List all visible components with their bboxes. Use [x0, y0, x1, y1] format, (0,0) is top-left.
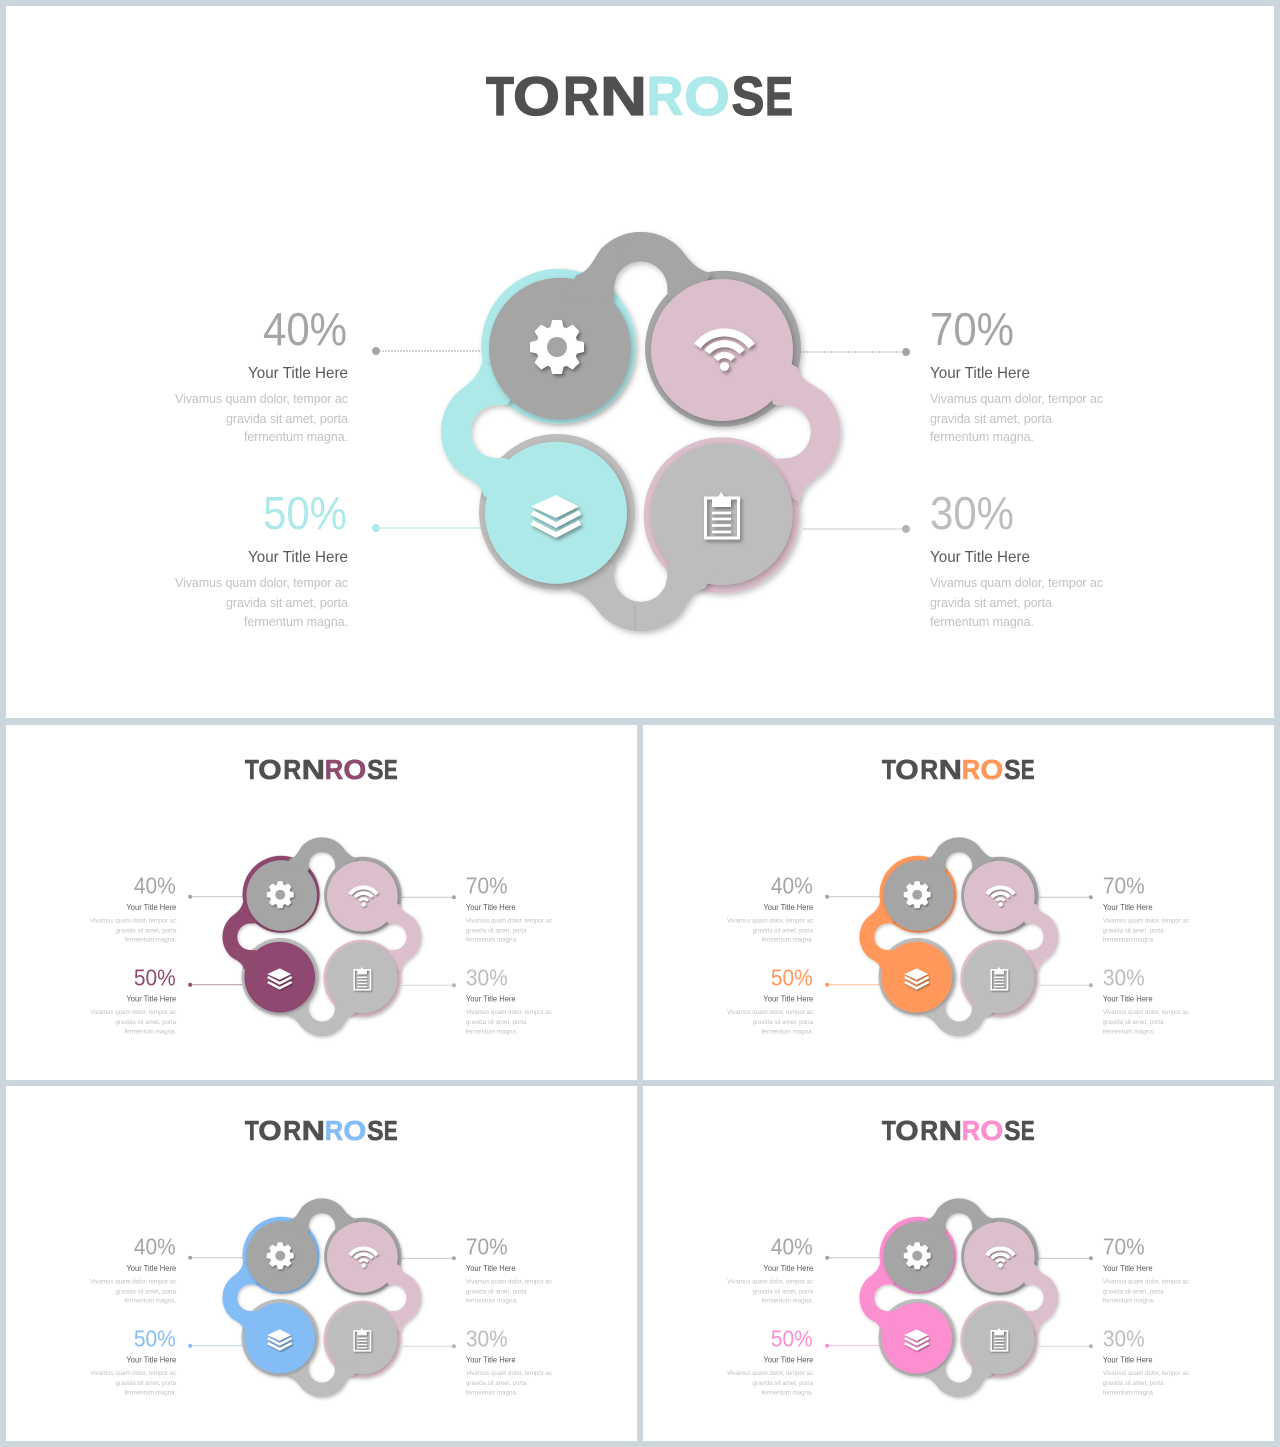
text block: 50%: 50%: [771, 964, 813, 990]
leader lines: [825, 1256, 1093, 1348]
title: T: [486, 65, 514, 127]
diagram: four linked circles: [222, 1198, 421, 1397]
text block: 50%: [727, 964, 814, 1036]
icon: wifi: [987, 1248, 1014, 1268]
text block: 70%: 70%: [1103, 873, 1145, 899]
text block: 40%: 40%: [134, 1234, 176, 1260]
text block: 40%: gravida sit amet, porta: [226, 412, 348, 426]
text block: 50%: [90, 1325, 177, 1397]
text block: 70%: [1103, 873, 1189, 943]
title: N: [939, 1115, 962, 1146]
panel: main teal slide: [6, 6, 1274, 718]
diagram: four linked circles: [859, 1198, 1058, 1397]
text block: 50%: gravida sit amet, porta: [226, 596, 348, 610]
text block: 40%: 40%: [771, 1234, 813, 1260]
title: R: [563, 65, 599, 127]
title: R: [920, 1115, 938, 1146]
title: E: [384, 1115, 398, 1146]
icon: wifi: [987, 887, 1014, 907]
title: N: [302, 754, 325, 785]
text block: 50%: Vivamus quam dolor, tempor ac: [175, 576, 348, 590]
title: R: [283, 754, 301, 785]
title: O: [980, 754, 1003, 785]
text block: 30%: fermentum magna.: [930, 615, 1034, 629]
text block: 50%: 50%: [263, 487, 347, 539]
text block: 50%: [727, 1325, 814, 1397]
title: O: [258, 754, 282, 785]
text block: 70%: Vivamus quam dolor, tempor ac: [1103, 918, 1189, 925]
text block: 30%: Vivamus quam dolor, tempor ac: [466, 1370, 552, 1377]
text block: 40%: 40%: [771, 873, 813, 899]
text block: 30%: 30%: [466, 964, 508, 990]
icon: gear: [267, 882, 293, 908]
slide content: pink: [727, 1115, 1189, 1397]
text block: 50%: Vivamus quam dolor, tempor ac: [727, 1370, 813, 1377]
text block: 40%: 40%: [263, 303, 347, 355]
text block: 70%: Your Title Here: [1103, 1264, 1153, 1273]
text block: 40%: fermentum magna.: [124, 1297, 176, 1304]
title: E: [384, 754, 398, 785]
title: S: [367, 1115, 383, 1146]
text block: 50%: fermentum magna.: [124, 1390, 176, 1397]
leader lines: [188, 895, 456, 987]
icon: wifi: [350, 887, 377, 907]
text block: 30%: fermentum magna.: [1103, 1029, 1155, 1036]
text block: 40%: fermentum magna.: [244, 430, 348, 444]
text block: 50%: Vivamus quam dolor, tempor ac: [90, 1370, 176, 1377]
text block: 40%: 40%: [134, 873, 176, 899]
text block: 30%: fermentum magna.: [1103, 1390, 1155, 1397]
icon: clipboard: [706, 492, 738, 538]
title: N: [600, 65, 647, 127]
text block: 50%: Your Title Here: [126, 995, 177, 1004]
text block: 40%: [175, 303, 348, 444]
text block: 70%: fermentum magna.: [1103, 1297, 1155, 1304]
panel: blue slide: [6, 1086, 637, 1441]
text block: 40%: Vivamus quam dolor, tempor ac: [727, 918, 813, 925]
icon: layers: [267, 968, 292, 988]
text block: 30%: 30%: [1103, 964, 1145, 990]
text block: 40%: Vivamus quam dolor, tempor ac: [727, 1279, 813, 1286]
title: S: [1004, 754, 1020, 785]
text block: 30%: gravida sit amet, porta: [1103, 1380, 1164, 1387]
title: O: [895, 754, 919, 785]
icon: wifi: [697, 332, 752, 371]
slide content: teal: [175, 65, 1103, 632]
diagram: four linked circles: [859, 837, 1058, 1036]
text block: 30%: gravida sit amet, porta: [930, 596, 1052, 610]
title: S: [367, 754, 383, 785]
title: R: [646, 65, 684, 127]
slide content: orange: [727, 754, 1189, 1036]
text block: 50%: fermentum magna.: [124, 1029, 176, 1036]
icon: clipboard: [991, 967, 1008, 990]
leader lines: [372, 347, 910, 533]
text block: 30%: [930, 487, 1103, 629]
text block: 40%: Your Title Here: [248, 365, 348, 382]
icon: gear: [904, 882, 930, 908]
text block: 70%: Vivamus quam dolor, tempor ac: [466, 918, 552, 925]
text block: 70%: fermentum magna.: [930, 430, 1034, 444]
text block: 40%: Vivamus quam dolor, tempor ac: [90, 1279, 176, 1286]
text block: 70%: 70%: [466, 873, 508, 899]
icon: wifi: [350, 1248, 377, 1268]
icon: layers: [904, 1329, 929, 1349]
title: R: [962, 754, 980, 785]
text block: 50%: gravida sit amet, porta: [115, 1019, 177, 1026]
title: R: [920, 754, 938, 785]
text block: 50%: Your Title Here: [763, 995, 814, 1004]
text block: 40%: Vivamus quam dolor, tempor ac: [90, 918, 176, 925]
text block: 40%: fermentum magna.: [124, 936, 176, 943]
text block: 40%: [90, 873, 177, 943]
text block: 50%: fermentum magna.: [761, 1029, 813, 1036]
text block: 70%: gravida sit amet, porta: [466, 928, 527, 935]
text block: 30%: fermentum magna.: [466, 1390, 518, 1397]
icon: gear: [531, 321, 583, 373]
title: T: [245, 754, 259, 785]
text block: 50%: gravida sit amet, porta: [752, 1019, 814, 1026]
title: S: [1004, 1115, 1020, 1146]
text block: 50%: Your Title Here: [763, 1356, 814, 1365]
text block: 50%: gravida sit amet, porta: [115, 1380, 177, 1387]
text block: 30%: 30%: [1103, 1325, 1145, 1351]
leader lines: [188, 1256, 456, 1348]
title: T: [882, 1115, 896, 1146]
panel: orange slide: [643, 725, 1274, 1080]
text block: 50%: fermentum magna.: [761, 1390, 813, 1397]
text block: 50%: 50%: [134, 1325, 176, 1351]
title: R: [325, 754, 343, 785]
text block: 40%: fermentum magna.: [761, 936, 813, 943]
text block: 40%: [90, 1234, 177, 1304]
text block: 30%: gravida sit amet, porta: [466, 1019, 527, 1026]
text block: 30%: Your Title Here: [466, 995, 516, 1004]
text block: 30%: [466, 964, 552, 1036]
title: R: [283, 1115, 301, 1146]
title: N: [939, 754, 962, 785]
text block: 50%: [90, 964, 177, 1036]
text block: 40%: fermentum magna.: [761, 1297, 813, 1304]
title: O: [513, 65, 560, 127]
diagram: four linked circles: [441, 232, 841, 632]
title: E: [1021, 1115, 1035, 1146]
text block: 50%: Vivamus quam dolor, tempor ac: [727, 1009, 813, 1016]
text block: 30%: gravida sit amet, porta: [466, 1380, 527, 1387]
text block: 70%: [466, 1234, 552, 1304]
text block: 40%: gravida sit amet, porta: [752, 928, 814, 935]
text block: 70%: 70%: [930, 303, 1014, 355]
panel: pink slide: [643, 1086, 1274, 1441]
text block: 30%: [1103, 964, 1189, 1036]
text block: 30%: Your Title Here: [466, 1356, 516, 1365]
text block: 50%: [175, 487, 348, 629]
title: T: [882, 754, 896, 785]
icon: layers: [904, 968, 929, 988]
title: N: [302, 1115, 325, 1146]
text block: 70%: Your Title Here: [466, 1264, 516, 1273]
text block: 50%: 50%: [134, 964, 176, 990]
text block: 70%: Vivamus quam dolor, tempor ac: [1103, 1279, 1189, 1286]
text block: 70%: gravida sit amet, porta: [466, 1289, 527, 1296]
text block: 70%: gravida sit amet, porta: [930, 412, 1052, 426]
text block: 50%: Your Title Here: [126, 1356, 177, 1365]
text block: 40%: Your Title Here: [763, 1264, 814, 1273]
text block: 70%: fermentum magna.: [1103, 936, 1155, 943]
leader lines: [825, 895, 1093, 987]
slide content: blue: [90, 1115, 552, 1397]
title: O: [258, 1115, 282, 1146]
text block: 40%: gravida sit amet, porta: [115, 1289, 177, 1296]
text block: 30%: 30%: [466, 1325, 508, 1351]
diagram: four linked circles: [222, 837, 421, 1036]
text block: 40%: Your Title Here: [763, 903, 814, 912]
title: E: [1021, 754, 1035, 785]
text block: 70%: Vivamus quam dolor, tempor ac: [930, 392, 1103, 406]
text block: 70%: [930, 303, 1103, 444]
text block: 70%: fermentum magna.: [466, 1297, 518, 1304]
text block: 30%: Vivamus quam dolor, tempor ac: [930, 576, 1103, 590]
title: E: [765, 65, 793, 127]
slide content: plum: [90, 754, 552, 1036]
text block: 40%: Vivamus quam dolor, tempor ac: [175, 392, 348, 406]
panel: plum slide: [6, 725, 637, 1080]
text block: 30%: Vivamus quam dolor, tempor ac: [1103, 1009, 1189, 1016]
text block: 40%: gravida sit amet, porta: [752, 1289, 814, 1296]
text block: 70%: fermentum magna.: [466, 936, 518, 943]
title: O: [343, 754, 366, 785]
title: O: [684, 65, 730, 127]
text block: 70%: 70%: [1103, 1234, 1145, 1260]
icon: gear: [904, 1243, 930, 1269]
text block: 50%: Your Title Here: [248, 549, 348, 566]
text block: 40%: [727, 873, 814, 943]
text block: 40%: Your Title Here: [126, 1264, 177, 1273]
text block: 70%: Your Title Here: [930, 365, 1030, 382]
icon: gear: [267, 1243, 293, 1269]
text block: 70%: gravida sit amet, porta: [1103, 928, 1164, 935]
text block: 50%: fermentum magna.: [244, 615, 348, 629]
icon: clipboard: [991, 1328, 1008, 1351]
title: R: [962, 1115, 980, 1146]
text block: 70%: Vivamus quam dolor, tempor ac: [466, 1279, 552, 1286]
text block: 30%: fermentum magna.: [466, 1029, 518, 1036]
text block: 30%: [466, 1325, 552, 1397]
text block: 40%: Your Title Here: [126, 903, 177, 912]
text block: 40%: [727, 1234, 814, 1304]
title: T: [245, 1115, 259, 1146]
icon: clipboard: [354, 1328, 371, 1351]
text block: 30%: Your Title Here: [930, 549, 1030, 566]
text block: 50%: gravida sit amet, porta: [752, 1380, 814, 1387]
text block: 30%: [1103, 1325, 1189, 1397]
title: R: [325, 1115, 343, 1146]
title: O: [343, 1115, 366, 1146]
text block: 50%: Vivamus quam dolor, tempor ac: [90, 1009, 176, 1016]
text block: 30%: 30%: [930, 487, 1014, 539]
text block: 70%: Your Title Here: [1103, 903, 1153, 912]
icon: clipboard: [354, 967, 371, 990]
text block: 70%: [1103, 1234, 1189, 1304]
text block: 30%: Vivamus quam dolor, tempor ac: [466, 1009, 552, 1016]
text block: 70%: 70%: [466, 1234, 508, 1260]
title: O: [980, 1115, 1003, 1146]
text block: 50%: 50%: [771, 1325, 813, 1351]
text block: 30%: Your Title Here: [1103, 1356, 1153, 1365]
text block: 30%: Vivamus quam dolor, tempor ac: [1103, 1370, 1189, 1377]
text block: 30%: gravida sit amet, porta: [1103, 1019, 1164, 1026]
title: S: [732, 65, 764, 127]
text block: 70%: Your Title Here: [466, 903, 516, 912]
text block: 70%: [466, 873, 552, 943]
icon: layers: [531, 495, 580, 535]
icon: layers: [267, 1329, 292, 1349]
text block: 40%: gravida sit amet, porta: [115, 928, 177, 935]
title: O: [895, 1115, 919, 1146]
text block: 70%: gravida sit amet, porta: [1103, 1289, 1164, 1296]
text block: 30%: Your Title Here: [1103, 995, 1153, 1004]
